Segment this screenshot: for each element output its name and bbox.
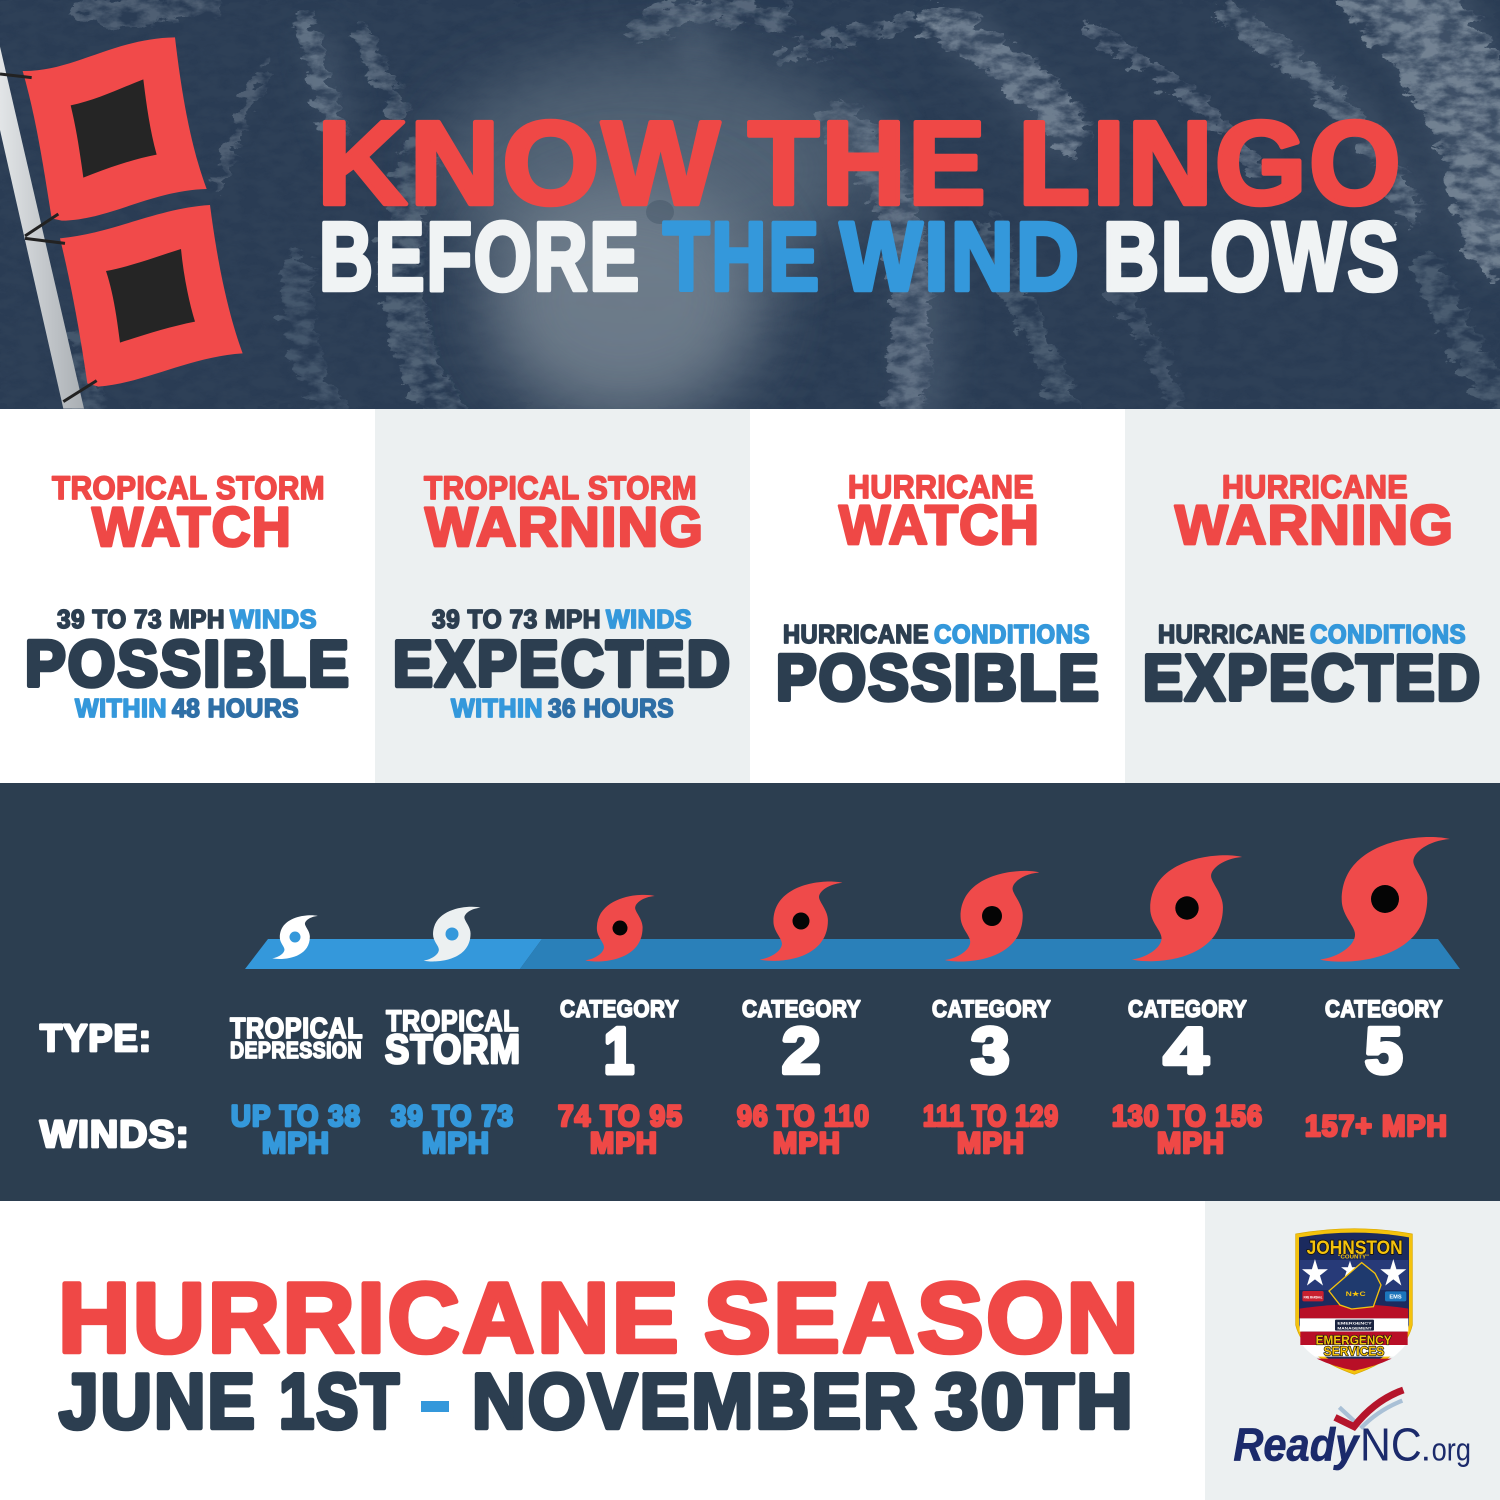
title: BEFORE [319, 202, 641, 311]
winds: tropical depression: UP TO 38 [231, 1100, 361, 1133]
logo: Johnston County Emergency Services shield: "COUNTY" [1338, 1255, 1369, 1261]
panel: tropical storm watch: WITHIN [75, 693, 167, 723]
winds: category 5: 157+ MPH [1305, 1110, 1448, 1143]
panel: hurricane warning: WARNING [1175, 493, 1454, 556]
logo: Johnston County Emergency Services shield [1296, 1229, 1412, 1374]
panel: logos [1205, 1201, 1500, 1500]
type: category 3: CATEGORY [932, 996, 1051, 1023]
header background: satellite hurricane [0, 0, 1500, 420]
panel: tropical storm warning: WINDS [606, 604, 692, 634]
type: tropical depression: TROPICAL [230, 1013, 363, 1045]
type: category 2: CATEGORY [742, 996, 861, 1023]
type: category 1: 1 [604, 1014, 634, 1087]
logo: Johnston County Emergency Services shield: ★ [1341, 1260, 1359, 1282]
logo: Johnston County Emergency Services shield: EMS [1389, 1295, 1402, 1301]
hurricane core glow [435, 55, 865, 285]
panel: tropical storm watch: 39 TO 73 MPH [57, 604, 225, 634]
dates: JUNE [59, 1357, 257, 1445]
icon: tropical storm [424, 907, 480, 961]
type: category 2 [742, 996, 861, 1087]
panel: hurricane watch [750, 409, 1125, 783]
panel: tropical storm watch: 48 HOURS [172, 693, 299, 723]
panel: hurricane watch: HURRICANE [848, 469, 1034, 505]
panel: tropical storm warning: WARNING [425, 495, 704, 558]
dates: 30TH [935, 1357, 1135, 1445]
type: tropical depression [230, 1013, 363, 1063]
type: category 2: 2 [782, 1014, 823, 1087]
logo: Johnston County Emergency Services shield: MANAGEMENT [1337, 1325, 1372, 1330]
panel: tropical storm watch: WINDS [230, 604, 317, 634]
panel: tropical storm watch: POSSIBLE [25, 627, 351, 700]
logo: ReadyNC.org: . [1422, 1439, 1429, 1467]
row label: winds: WINDS: [40, 1114, 190, 1156]
panel: storm scale [0, 783, 1500, 1201]
flag ties [0, 74, 97, 402]
type: tropical storm: STORM [385, 1026, 521, 1072]
icon: category 5 [1320, 837, 1450, 962]
title [317, 97, 1403, 311]
heading: hurricane season: SEASON [704, 1262, 1141, 1373]
panel: tropical storm watch: TROPICAL STORM [52, 470, 325, 506]
logo: Johnston County Emergency Services shield: ★ [1380, 1255, 1407, 1291]
type: tropical storm: TROPICAL [386, 1005, 519, 1038]
title: THE [748, 97, 988, 230]
icon: category 4 [1132, 855, 1242, 961]
winds: category 2 [737, 1100, 870, 1160]
icon: hurricane warning flags on a pole [0, 37, 243, 409]
pole [0, 47, 84, 409]
type: category 1: CATEGORY [560, 996, 679, 1023]
heading: hurricane season: HURRICANE [58, 1262, 681, 1373]
winds: tropical storm: 39 TO 73 [391, 1100, 514, 1133]
winds: tropical depression [231, 1100, 361, 1160]
logo: ReadyNC.org: org [1432, 1431, 1471, 1468]
panel: hurricane warning: CONDITIONS [1310, 619, 1466, 649]
logo: Johnston County Emergency Services shield: EMERGENCY [1337, 1320, 1372, 1325]
panel: hurricane warning: HURRICANE [1222, 469, 1408, 505]
panel: tropical storm warning [375, 409, 750, 783]
title: KNOW [317, 97, 722, 230]
type: category 3 [932, 996, 1051, 1087]
panel: hurricane warning [1125, 409, 1500, 783]
panel: hurricane season dates [0, 1201, 1205, 1500]
title: BLOWS [1103, 202, 1401, 311]
panel: tropical storm warning: 36 HOURS [548, 693, 674, 723]
logo: ReadyNC.org: Ready [1233, 1419, 1360, 1471]
panel: hurricane watch: POSSIBLE [776, 641, 1101, 714]
logo: ReadyNC.org: NC [1360, 1419, 1422, 1471]
heading: hurricane season [58, 1262, 1141, 1373]
panel: hurricane watch: WATCH [839, 493, 1040, 556]
logo: Johnston County Emergency Services shield: SERVICES [1324, 1344, 1385, 1359]
type: tropical depression: DEPRESSION [230, 1037, 362, 1063]
winds: category 4: 130 TO 156 [1112, 1100, 1263, 1133]
icon: category 1 [585, 895, 655, 962]
panel: tropical storm warning: TROPICAL STORM [424, 470, 697, 506]
icon: category 2 [760, 882, 842, 961]
panel: hurricane watch: HURRICANE [783, 619, 929, 649]
panel: hurricane watch: CONDITIONS [934, 619, 1090, 649]
type: category 3: 3 [971, 1014, 1012, 1087]
logo: Johnston County Emergency Services shield: N★C [1346, 1290, 1366, 1298]
flag: lower [60, 205, 243, 387]
type: category 4: CATEGORY [1128, 996, 1247, 1023]
type: category 5: 5 [1365, 1014, 1405, 1087]
panel: tropical storm warning: EXPECTED [393, 627, 732, 700]
icon: tropical depression [272, 915, 318, 959]
winds: category 2: MPH [773, 1127, 841, 1160]
winds: tropical storm [391, 1100, 514, 1160]
dates: NOVEMBER [472, 1357, 919, 1445]
logo: Johnston County Emergency Services shield: FIRE MARSHAL [1304, 1296, 1323, 1300]
panel: tropical storm warning: WITHIN [451, 693, 543, 723]
type: category 5: CATEGORY [1325, 996, 1443, 1023]
panel: tropical storm watch: WATCH [92, 495, 292, 558]
type: category 4 [1128, 996, 1247, 1087]
dates: 1ST [279, 1357, 401, 1445]
row label: type: TYPE: [40, 1018, 152, 1060]
logo: Johnston County Emergency Services shield: JOHNSTON [1307, 1238, 1403, 1259]
panel: tropical storm warning: 39 TO 73 MPH [432, 604, 601, 634]
wind scale band [245, 939, 1460, 969]
logo: Johnston County Emergency Services shield: ★ [1302, 1255, 1329, 1291]
winds: category 4 [1112, 1100, 1263, 1160]
winds: category 1: MPH [590, 1127, 658, 1160]
title: LINGO [1018, 97, 1403, 230]
winds: category 1: 74 TO 95 [558, 1100, 683, 1133]
type: category 4: 4 [1164, 1014, 1211, 1087]
winds: category 3: MPH [957, 1127, 1025, 1160]
title: WIND [840, 202, 1081, 311]
winds: tropical depression: MPH [262, 1127, 330, 1160]
winds: category 3 [923, 1100, 1059, 1160]
type: category 5 [1325, 996, 1443, 1087]
winds: category 3: 111 TO 129 [923, 1100, 1059, 1133]
winds: tropical storm: MPH [422, 1127, 490, 1160]
winds: category 4: MPH [1157, 1127, 1225, 1160]
type: tropical storm [385, 1005, 521, 1072]
winds: category 1 [558, 1100, 683, 1160]
panel: hurricane warning: HURRICANE [1158, 619, 1305, 649]
icon: category 3 [945, 871, 1039, 962]
logo: ReadyNC.org [1233, 1390, 1471, 1471]
dates [59, 1357, 1135, 1445]
logo: Johnston County Emergency Services shield: EMERGENCY [1316, 1332, 1392, 1347]
winds: category 2: 96 TO 110 [737, 1100, 870, 1133]
type: category 1 [560, 996, 679, 1087]
flag: upper [23, 37, 207, 221]
title: THE [663, 202, 821, 311]
panel: tropical storm watch [0, 409, 375, 783]
